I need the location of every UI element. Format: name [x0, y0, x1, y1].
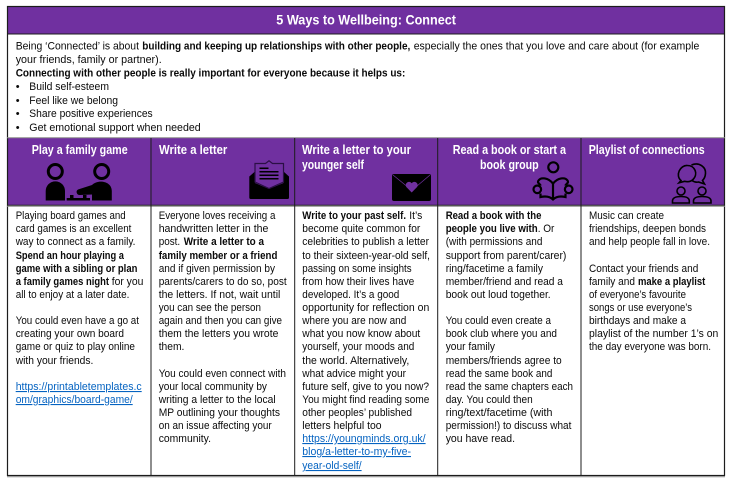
- panel: write a letter text: family member or a friend: [159, 250, 277, 262]
- panel: write to your younger self text: It’s: [409, 210, 423, 222]
- panel: read a book text: people you live with: [446, 223, 538, 235]
- panel: write to your younger self text: letters helpful too: [302, 420, 382, 432]
- title banner: [8, 6, 724, 34]
- heading: read a book or start a book group: [453, 143, 567, 172]
- panel: play a family game text: way to connect as a family.: [15, 236, 135, 248]
- panel: write a letter text: post.: [159, 236, 180, 248]
- bullet list: Get emotional support when needed: [29, 122, 201, 134]
- bullet list: •: [16, 95, 20, 107]
- panel: write to your younger self text: future self, give to you now?: [302, 381, 429, 393]
- icon: open envelope with letter: [249, 161, 289, 199]
- panel: write to your younger self text: [301, 210, 430, 472]
- panel: play a family game text: [15, 210, 143, 406]
- panel: write to your younger self text: developed. It’s a good: [302, 289, 399, 301]
- panel: playlist of connections text: family and: [589, 276, 635, 288]
- panel: write a letter text: your local community by: [159, 381, 267, 393]
- panel: write a letter text: Write a letter to a: [184, 236, 265, 248]
- panel: write to your younger self text: what advice might your: [301, 368, 406, 380]
- panel: write a letter text: writing a letter to the local: [158, 394, 276, 406]
- panel: read a book text: book out loud together.: [446, 289, 551, 301]
- panel: write to your younger self text: passing on some insights: [302, 263, 412, 275]
- icon: envelope with heart: [392, 174, 431, 201]
- panel: write to your younger self text: celebrities to publish a letter: [302, 236, 429, 248]
- panel: write to your younger self text: other peoples’ published: [302, 407, 412, 419]
- panel: play a family game text: for you: [112, 276, 143, 288]
- panel: introduction: your friends, family or partner).: [16, 54, 162, 66]
- heading: playlist of connections: Playlist of connections: [589, 143, 705, 157]
- panel: play a family game text: a family games night: [16, 276, 109, 288]
- panel: write a letter text: community.: [159, 433, 211, 445]
- panel: playlist of connections text: playlist of the number 1’s on: [589, 328, 718, 340]
- panel: write a letter text: you can see the person: [159, 302, 261, 314]
- panel: write a letter text: MP outlining your thoughts: [159, 407, 280, 419]
- panel: play a family game text: with your friends.: [15, 355, 93, 367]
- icon: person reading a book: [534, 162, 572, 200]
- panel: read a book text: . Or: [538, 223, 555, 235]
- panel: playlist of connections text: birthdays and make a: [589, 315, 687, 327]
- panel: write to your younger self text: You might find reading some: [302, 394, 429, 406]
- panel: write a letter text: You could even connect with: [159, 368, 286, 380]
- link: board game templates: https://printabletemplates.c: [16, 381, 142, 393]
- title banner: 5 Ways to Wellbeing: Connect: [276, 12, 456, 28]
- panel: write a letter text: and if given permission by: [159, 263, 275, 275]
- panel: play a family game text: You could even have a go at: [16, 315, 139, 327]
- panel: read a book text: Read a book with the: [446, 210, 541, 222]
- panel: playlist of connections text: make a playlist: [638, 276, 706, 288]
- panel: write a letter text: [158, 210, 287, 445]
- panel: write to your younger self text: to their sixteen-year-old self,: [302, 250, 430, 262]
- panel: introduction: [16, 40, 699, 134]
- panel: write a letter text: parents/carers to do so, post: [159, 276, 287, 288]
- panel: playlist of connections text: [589, 210, 718, 353]
- panel: read a book text: (with permissions and: [446, 236, 542, 248]
- panel: playlist of connections text: songs or use everyone’s: [589, 302, 692, 314]
- panel: write a letter text: the letters. If not, wait until: [159, 289, 280, 301]
- bullet list: Build self-esteem: [29, 81, 109, 93]
- panel: write to your younger self text: yourself, your moods and: [302, 341, 414, 353]
- heading: write a letter to your younger self: [302, 143, 411, 172]
- bullet list: •: [16, 108, 20, 120]
- bullet list: Feel like we belong: [29, 95, 118, 107]
- panel: introduction: building and keeping up relationships with other people,: [142, 40, 410, 52]
- panel: play a family game text: Spend an hour playing a: [16, 250, 125, 262]
- panel: play a family game text: card games is an excellent: [16, 223, 131, 235]
- panel: write a letter text: on an issue affecting your: [159, 420, 272, 432]
- heading: read a book or start a book group: book group: [480, 158, 539, 172]
- panel: write to your younger self text: opportunity for reflection on: [302, 302, 429, 314]
- panel: read a book text: your family: [446, 341, 495, 353]
- bullet list: •: [16, 122, 20, 134]
- panel: write to your younger self text: from how their lives have: [302, 276, 414, 288]
- panel: playlist of connections text: and help people fall in love.: [589, 236, 710, 248]
- panel: play a family game text: game or quiz to play online: [16, 341, 135, 353]
- panel: write to your younger self text: become quite common for: [302, 223, 421, 235]
- panel: write a letter text: again and then you can give: [159, 315, 282, 327]
- heading: write a letter to your younger self: Write a letter to your: [302, 143, 411, 157]
- icon: two people playing a board game: [46, 164, 112, 200]
- panel: introduction: especially the ones that you love and care about (for example: [414, 40, 699, 52]
- panel: write a letter text: them.: [159, 341, 184, 353]
- panel: read a book text: read the same chapters each: [446, 381, 573, 393]
- heading: read a book or start a book group: Read a book or start a: [453, 143, 567, 157]
- link: young minds letter: year-old-self/: [302, 460, 362, 472]
- panel: read a book text: You could even create a: [446, 315, 552, 327]
- heading: play a family game: Play a family game: [32, 143, 128, 157]
- panel: read a book text: support from parent/carer): [446, 250, 566, 262]
- link: young minds letter: blog/a-letter-to-my-five-: [302, 446, 411, 458]
- panel: read a book text: day. You could then: [446, 394, 533, 406]
- panel: write a letter text: them the letters you wrote: [159, 328, 278, 340]
- panel: read a book text: member/friend and read a: [446, 276, 564, 288]
- link: board game templates: [16, 381, 142, 406]
- panel: play a family game text: game with a sibling or plan: [16, 263, 138, 275]
- panel: write to your younger self text: the world. Alternatively,: [302, 355, 409, 367]
- panel: introduction: Connecting with other people is really important for everyone because it helps us:: [16, 68, 405, 80]
- icon: two people with speech bubbles: [672, 164, 711, 203]
- heading: write a letter to your younger self: younger self: [302, 158, 365, 172]
- panel: read a book text: you have read.: [446, 433, 515, 445]
- panel: read a book text: members/friends agree to: [446, 355, 562, 367]
- link: young minds letter: [302, 433, 427, 472]
- panel: read a book text: book club where you and: [446, 328, 557, 340]
- panel: write to your younger self text: where you are now and: [301, 315, 406, 327]
- panel: read a book text: [446, 210, 573, 445]
- bullet list: Share positive experiences: [29, 108, 153, 120]
- bullet list: •: [16, 81, 20, 93]
- heading: write a letter: Write a letter: [159, 143, 227, 157]
- bullet list: [16, 81, 201, 134]
- panel: playlist of connections text: friendships, deepen bonds: [589, 223, 706, 235]
- panel: introduction: Being ‘Connected’ is about: [16, 40, 139, 52]
- panel: playlist of connections text: Music can create: [589, 210, 664, 222]
- column header band: [8, 138, 724, 206]
- panel: write to your younger self text: what you now know about: [301, 328, 420, 340]
- panel: playlist of connections text: Contact your friends and: [589, 263, 698, 275]
- panel: read a book text: ring/text/facetime (with: [446, 407, 552, 419]
- link: young minds letter: https://youngminds.org.uk/: [302, 433, 427, 445]
- panel: playlist of connections text: the day everyone was born.: [589, 341, 711, 353]
- panel: play a family game text: creating your own board: [16, 328, 124, 340]
- panel: read a book text: read the same book and: [446, 368, 552, 380]
- panel: playlist of connections text: of everyone’s favourite: [589, 289, 686, 301]
- panel: play a family game text: all to enjoy at a later date.: [16, 289, 129, 301]
- panel: write a letter text: Everyone loves receiving a: [159, 210, 276, 222]
- panel: write to your younger self text: Write to your past self.: [302, 210, 406, 222]
- panel: play a family game text: Playing board games and: [16, 210, 126, 222]
- panel: write a letter text: handwritten letter in the: [159, 223, 268, 235]
- panel: read a book text: permission!) to discuss what: [446, 420, 571, 432]
- link: board game templates: om/graphics/board-game/: [16, 394, 134, 406]
- panel: read a book text: ring/facetime a family: [446, 263, 543, 275]
